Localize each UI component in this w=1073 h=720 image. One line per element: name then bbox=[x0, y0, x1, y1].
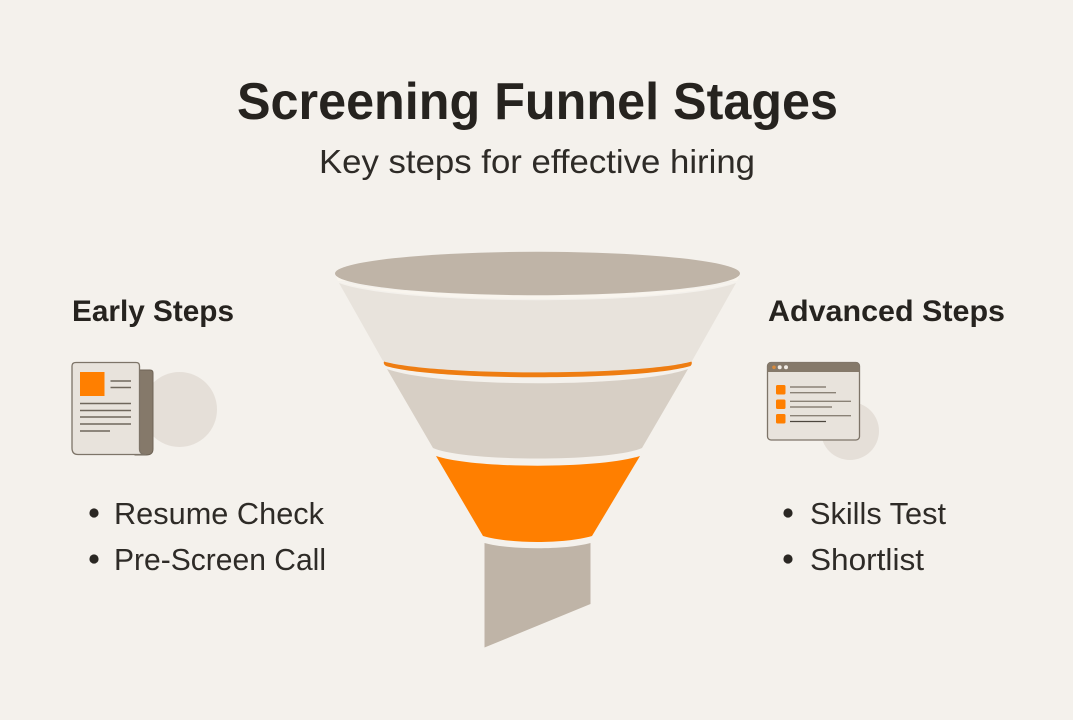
funnel: cream rim bbox=[335, 274, 740, 299]
funnel: top segment bbox=[339, 283, 736, 374]
list: early steps: Pre-Screen Call bbox=[114, 542, 326, 577]
subtitle: Key steps for effective hiring bbox=[319, 143, 755, 180]
panel: advanced steps bbox=[768, 295, 1005, 577]
list: advanced steps: Skills Test bbox=[810, 496, 946, 531]
title: Screening Funnel Stages bbox=[237, 73, 838, 131]
funnel: spout bbox=[484, 543, 590, 648]
funnel: orange band bbox=[384, 362, 692, 377]
heading: advanced steps: Advanced Steps bbox=[768, 295, 1005, 328]
list: advanced steps bbox=[783, 496, 946, 577]
list: early steps bbox=[89, 496, 326, 577]
funnel bbox=[335, 252, 740, 648]
icon: resume document bbox=[72, 362, 217, 455]
funnel: opening ellipse bbox=[335, 252, 740, 295]
panel: early steps bbox=[72, 295, 326, 577]
list: early steps: Resume Check bbox=[114, 496, 324, 531]
list: advanced steps: Shortlist bbox=[810, 542, 924, 577]
icon: checklist window bbox=[768, 362, 879, 460]
funnel: orange segment bbox=[436, 456, 640, 542]
heading: early steps: Early Steps bbox=[72, 295, 234, 328]
funnel: middle segment bbox=[387, 369, 688, 458]
